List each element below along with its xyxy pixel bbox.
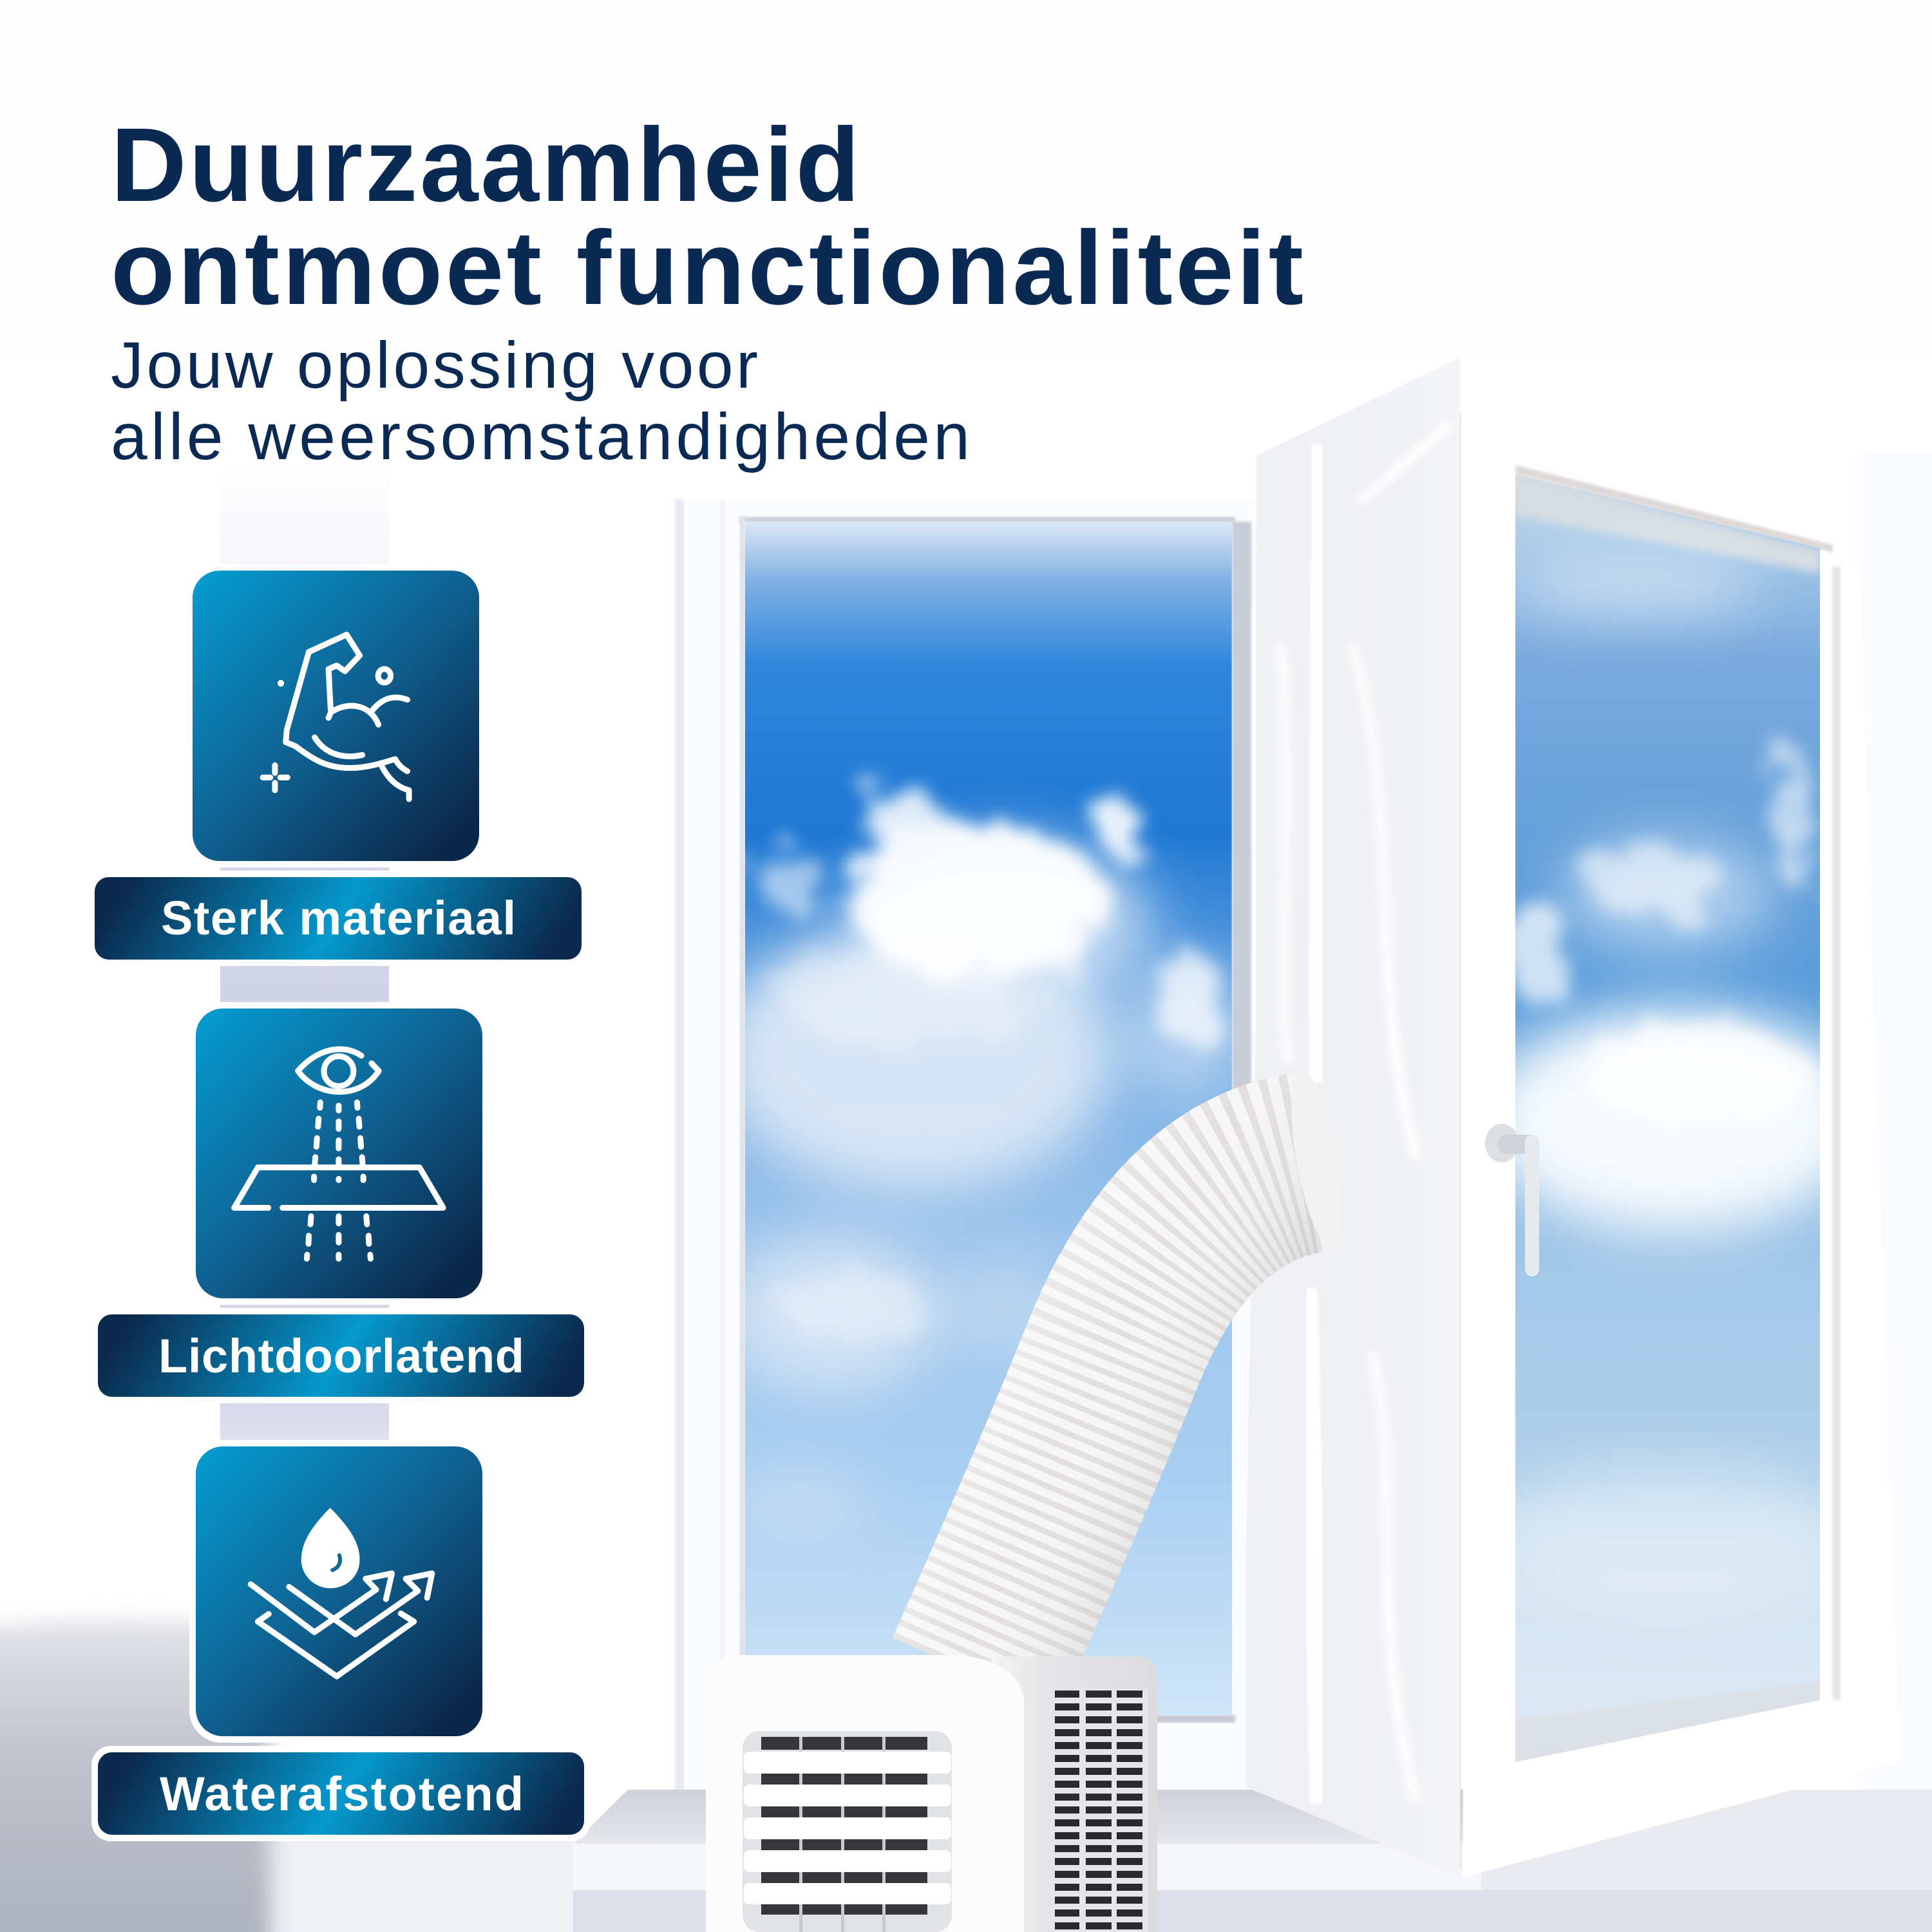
window handle [1485, 1124, 1539, 1276]
label: lichtdoorlatend [91, 1308, 591, 1403]
icon tile: strong arm [186, 564, 486, 867]
subtitle: Jouw oplossing voor [111, 328, 758, 402]
title: Duurzaamheid [111, 106, 860, 223]
label: sterk materiaal: Sterk materiaal [161, 891, 516, 945]
feature: lichtdoorlatend [91, 1002, 591, 1403]
frame jamb beside left pane [1232, 522, 1251, 1101]
portable air conditioner [706, 1655, 1157, 1932]
title: ontmoet functionaliteit [111, 209, 1303, 327]
icon tile: eye and light through film [189, 1002, 489, 1305]
window frame [675, 499, 1255, 1794]
feature: sterk materiaal [88, 564, 588, 966]
subtitle: alle weersomstandigheden [111, 400, 970, 473]
sky and clouds: left pane [715, 522, 1243, 1715]
title [111, 106, 1303, 327]
label: lichtdoorlatend: Lichtdoorlatend [158, 1329, 524, 1383]
window sill [573, 1790, 1932, 1932]
label: sterk materiaal [88, 871, 588, 966]
unit side with grille [992, 1656, 1157, 1932]
fabric window seal [1246, 357, 1460, 1877]
unit front with louvres [706, 1655, 1024, 1932]
sky and clouds: right pane [1515, 474, 1820, 1762]
air hose [976, 1067, 1353, 1674]
open window sash with fabric [1452, 357, 1900, 1877]
icon tile: water drop and repelling layers [189, 1440, 489, 1743]
label: waterafstotend [91, 1746, 591, 1841]
feature: waterafstotend [91, 1440, 591, 1841]
subtitle [111, 328, 970, 473]
background: sofa [0, 1620, 574, 1932]
label: waterafstotend: Waterafstotend [160, 1767, 524, 1821]
